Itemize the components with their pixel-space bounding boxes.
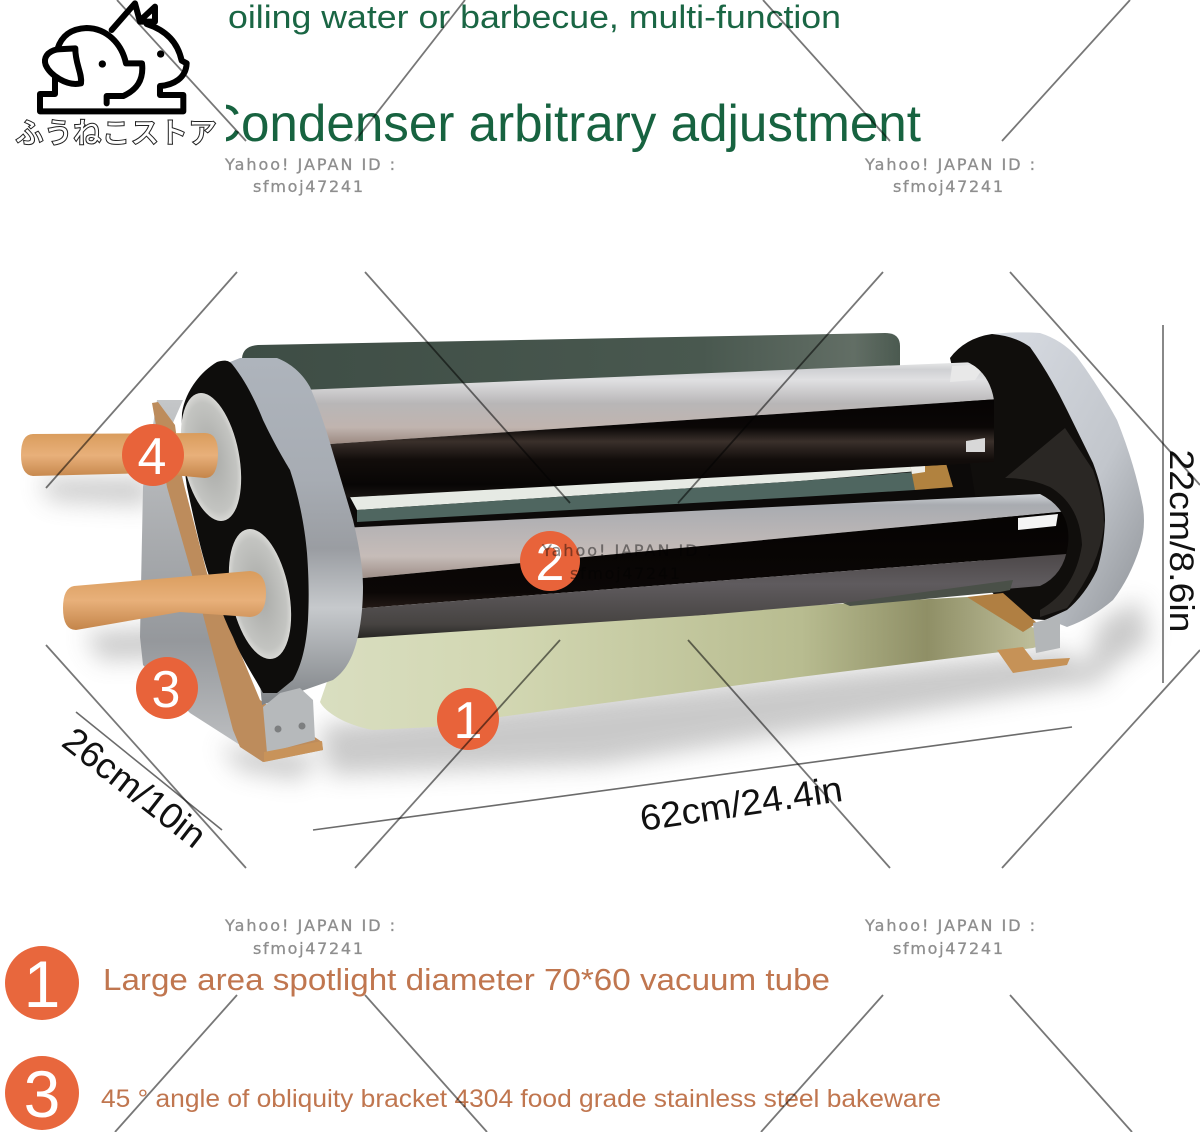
watermark IDs: Yahoo! JAPAN ID : [864,916,1035,935]
badge 2: 2 [536,534,564,592]
logo: dog and cat store mark [15,3,217,150]
legend item 1: Large area spotlight diameter 70*60 vacuum tube [103,962,830,997]
dimension: depth: 26cm/10in [55,719,214,856]
right end plate: black [950,334,1105,620]
lower wooden handle [63,571,266,630]
dimension: width: 62cm/24.4in [637,768,845,839]
legend item 1: 1 [24,947,60,1021]
watermark IDs: Yahoo! JAPAN ID : [541,541,712,560]
left wood frame [152,402,323,762]
badge 4 [122,424,184,486]
badge 2 [520,531,580,592]
ground shadows [40,478,1150,780]
left foot bracket [263,688,323,762]
watermark IDs: sfmoj47241 [570,564,680,583]
left bracket [140,400,240,745]
watermark IDs: Yahoo! JAPAN ID : [224,155,395,174]
watermark IDs: sfmoj47241 [253,939,363,958]
badge 4: 4 [138,428,166,486]
upper lens disc [171,388,251,526]
legend item 3: 3 [24,1057,60,1131]
icon: dog and cat [40,3,187,111]
watermark IDs: Yahoo! JAPAN ID : [224,916,395,935]
legend item 3 [5,1056,941,1131]
watermark IDs: sfmoj47241 [253,177,363,196]
strip reflection under lower tube [843,580,1013,606]
store name: ふうねこストア [15,118,217,150]
watermark IDs: sfmoj47241 [893,939,1003,958]
legend item 1 [5,946,830,1021]
product illustration: solar cooker [21,332,1150,780]
upper wooden handle [21,433,218,478]
right end plate: silver [985,332,1144,627]
dimension: width [313,727,1072,839]
left end plate: silver [230,358,363,705]
lower reflector panel [320,597,1060,730]
badge 1 [437,688,499,750]
badge 1: 1 [454,692,482,750]
back reflector panel [242,333,900,395]
badge 3 [136,657,198,719]
upper vacuum tube [300,361,1000,500]
lower lens disc [219,524,301,664]
reflection between tubes [340,450,1005,530]
badge 3: 3 [152,661,180,719]
legend item 3: 45 ° angle of obliquity bracket 4304 food grade stainless steel bakeware [101,1085,941,1113]
watermark IDs: sfmoj47241 [893,177,1003,196]
lower vacuum tube [354,494,1068,638]
heading: top cropped line: oiling water or barbecue, multi-function [228,0,841,35]
watermark IDs: Yahoo! JAPAN ID : [864,155,1035,174]
dimension: height: 22cm/8.6in [1162,450,1200,632]
watermark IDs [224,155,1035,958]
heading: condenser adjustment: Condenser arbitrary adjustment [204,95,922,153]
left end plate: black [182,361,309,693]
right feet [967,593,1070,673]
